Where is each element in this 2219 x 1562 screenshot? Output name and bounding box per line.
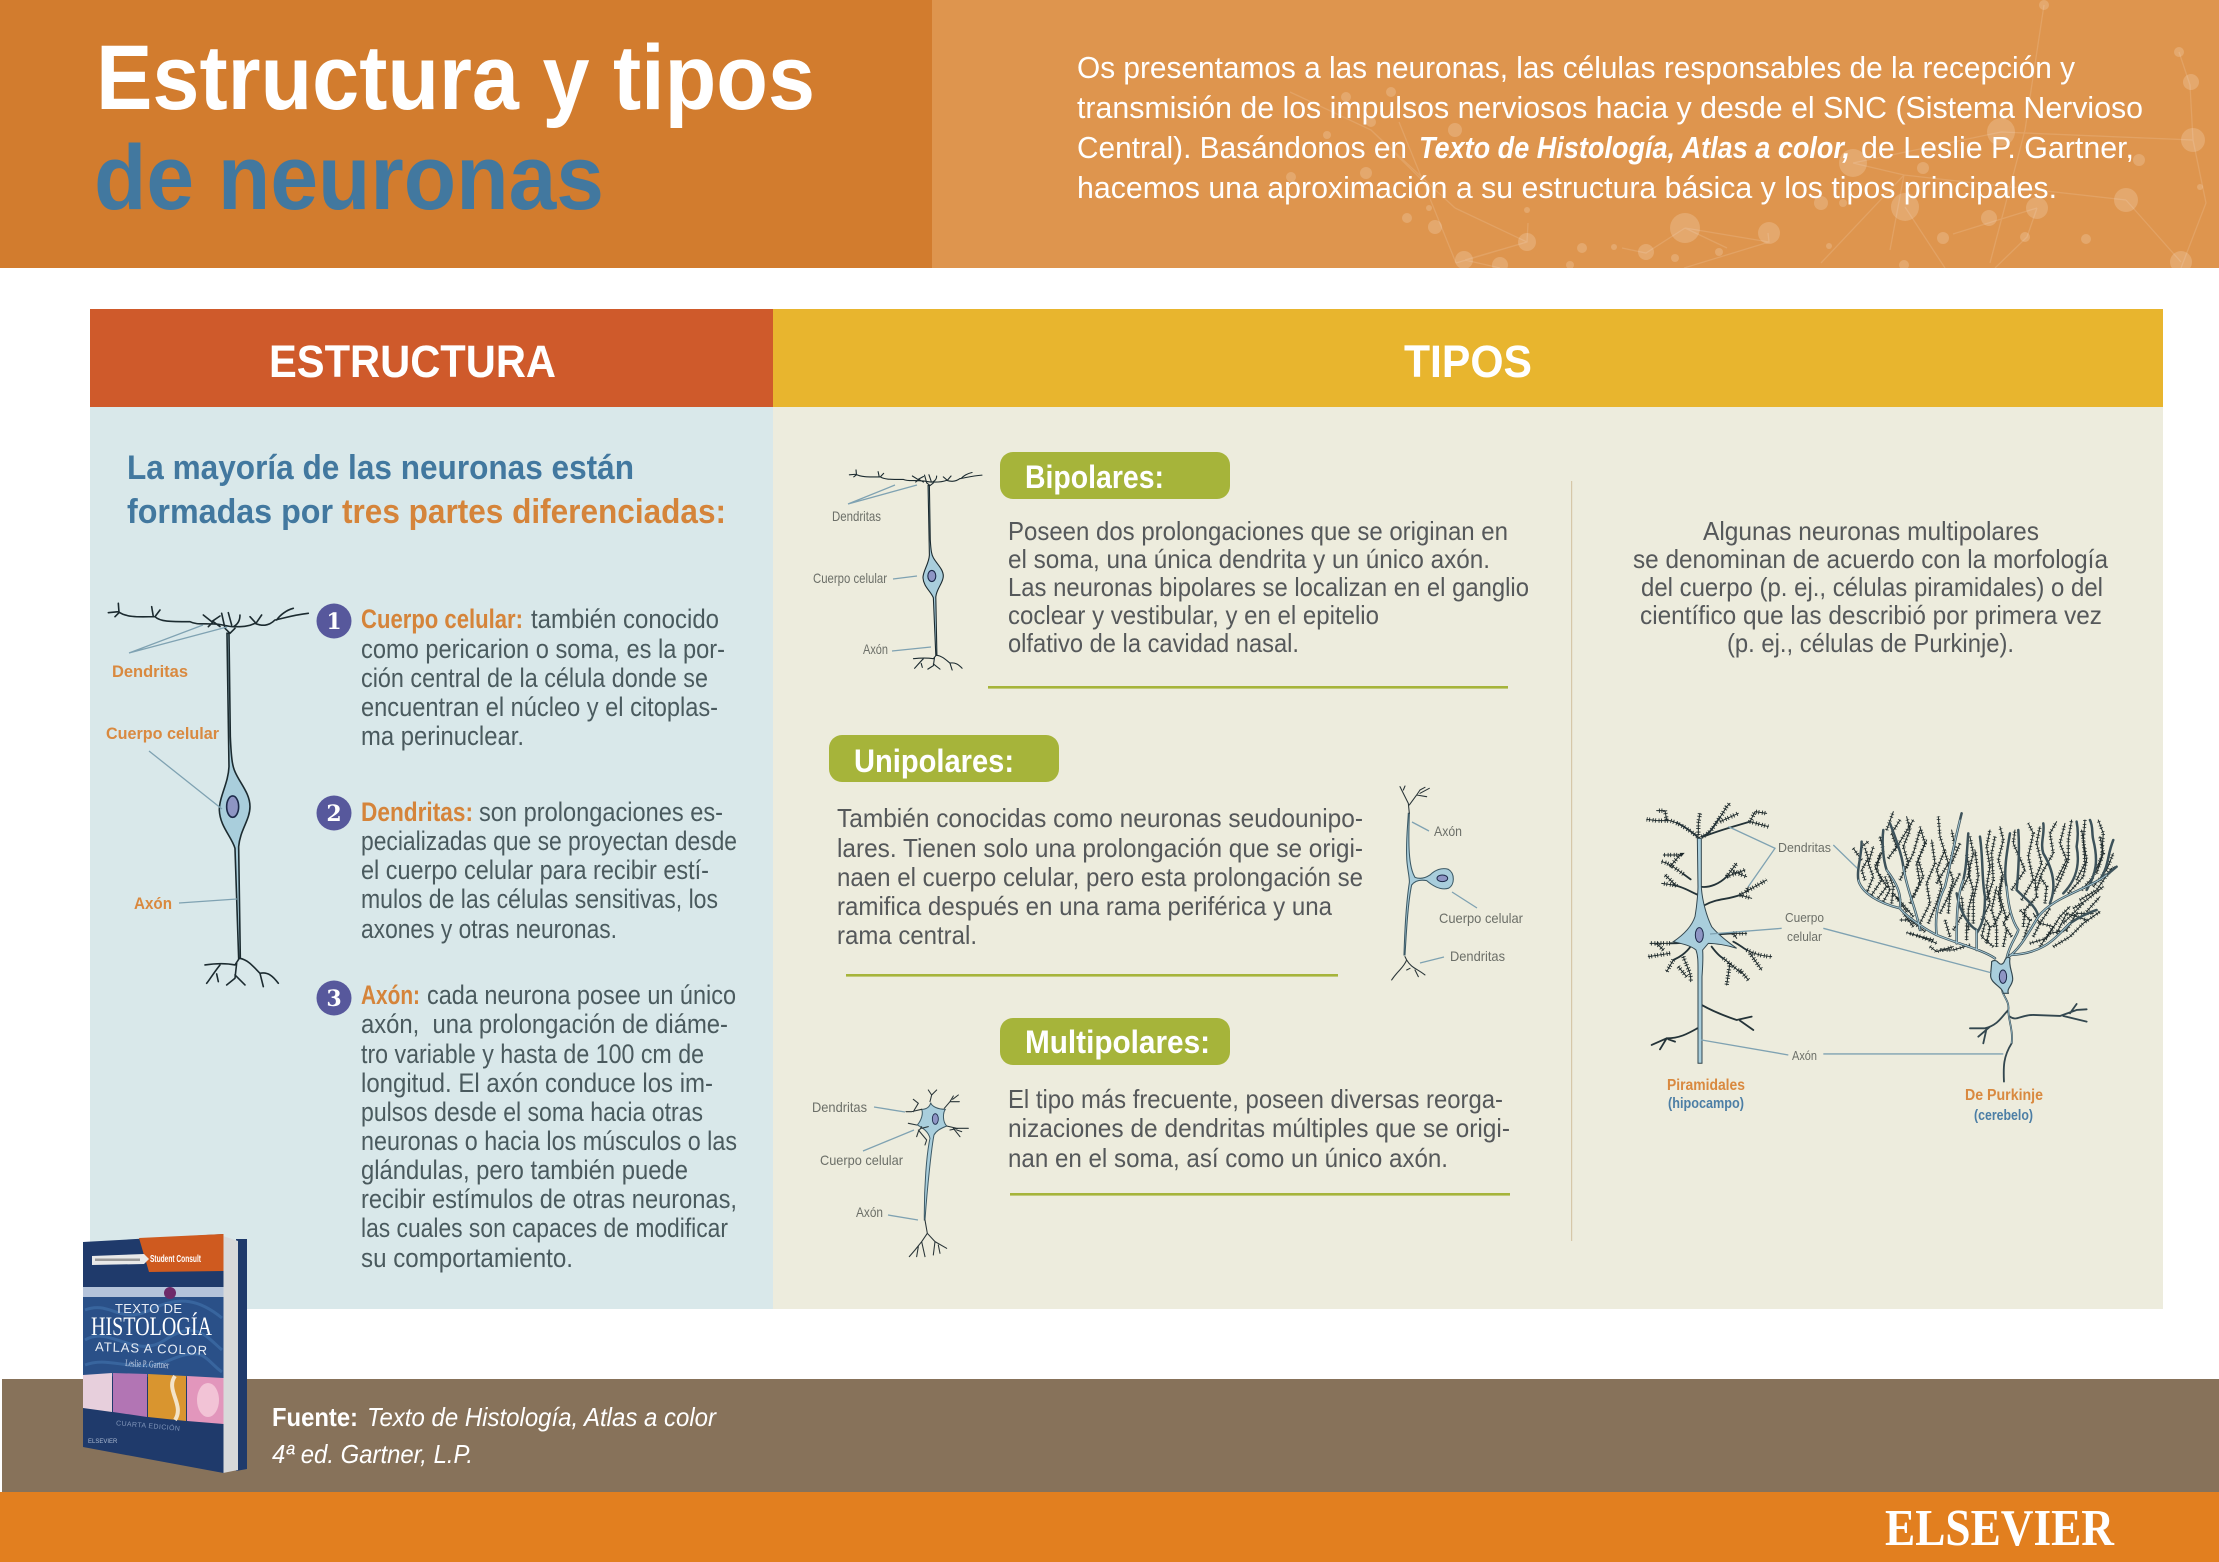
item 3: axón: pulsos desde el soma hacia otras	[361, 1097, 703, 1127]
label: dendritas: Dendritas	[1778, 840, 1831, 855]
item 2: dendritas: pecializadas que se proyectan desde	[361, 826, 737, 856]
diagram: multipolar neuron: Axón	[856, 1204, 883, 1220]
item 3: axón: Axón:	[361, 980, 420, 1010]
text: other multipolar neurons: Algunas neuronas multipolares	[1703, 516, 2039, 546]
diagram: unipolar neuron	[1392, 786, 1523, 980]
label: cuerpo celular: Cuerpo celular	[106, 724, 219, 743]
text: unipolares: También conocidas como neuronas seudounipo-	[837, 803, 1363, 833]
caption: piramidales: Piramidales	[1667, 1077, 1745, 1094]
diagram: bipolar neuron	[813, 470, 982, 670]
text: bipolares: Poseen dos prolongaciones que se originan en	[1008, 516, 1508, 546]
title: de neuronas	[94, 127, 604, 229]
caption: de Purkinje	[1965, 1087, 2043, 1124]
pill: unipolares: Unipolares:	[854, 743, 1014, 779]
source text: 4ª ed. Gartner, L.P.	[272, 1439, 473, 1469]
text: bipolares: coclear y vestibular, y en el epitelio	[1008, 600, 1379, 630]
item 1: cuerpo celular: también conocido	[531, 604, 719, 634]
diagram: unipolar neuron: Axón	[1434, 823, 1462, 839]
label: cuerpo celular	[1785, 910, 1824, 944]
text: other multipolar neurons: (p. ej., células de Purkinje).	[1727, 628, 2014, 658]
source band	[2, 1379, 2219, 1492]
caption: de Purkinje: De Purkinje	[1965, 1087, 2043, 1104]
item 3: axón: longitud. El axón conduce los im-	[361, 1068, 713, 1098]
source text	[272, 1402, 717, 1469]
item 3: axón: neuronas o hacia los músculos o las	[361, 1126, 737, 1156]
item 2: dendritas: Dendritas:	[361, 797, 473, 827]
neuron: pyramidal	[1647, 803, 1772, 1063]
subheading: La mayoría de las neuronas están	[127, 449, 634, 487]
panel: estructura	[90, 309, 773, 1309]
text: other multipolar neurons: se denominan de acuerdo con la morfología	[1633, 544, 2108, 574]
subheading	[127, 449, 726, 531]
diagram: multipolar neuron	[812, 1090, 968, 1257]
heading: estructura	[90, 309, 773, 407]
caption: piramidales	[1667, 1077, 1745, 1112]
section: unipolares	[829, 735, 1523, 980]
diagram: unipolar neuron: Dendritas	[1450, 948, 1505, 964]
item 1: cuerpo celular: como pericarion o soma, es la por-	[361, 634, 725, 664]
item 3: axón: axón, una prolongación de diáme-	[361, 1009, 728, 1039]
text: other multipolar neurons	[1633, 516, 2108, 658]
logo: elsevier: ELSEVIER	[1885, 1500, 2115, 1557]
heading: tipos: TIPOS	[1404, 336, 1532, 387]
book cover: TEXTO DE	[115, 1301, 182, 1316]
item 2: dendritas: axones y otras neuronas.	[361, 914, 617, 944]
label: dendritas: Dendritas	[112, 662, 188, 681]
title	[94, 27, 815, 229]
subheading: tres partes diferenciadas:	[342, 493, 726, 531]
pill: bipolares	[1000, 452, 1230, 499]
text: unipolares: rama central.	[837, 920, 977, 950]
number badge 3	[316, 980, 352, 1016]
pill: bipolares: Bipolares:	[1025, 459, 1164, 495]
book cover: CUARTA EDICIÓN	[116, 1418, 181, 1433]
book cover: Student Consult	[150, 1254, 201, 1265]
pill: multipolares: Multipolares:	[1025, 1024, 1210, 1060]
network background pattern	[1286, 0, 2206, 273]
source text: Texto de Histología, Atlas a color	[367, 1402, 717, 1432]
item 3: axón: su comportamiento.	[361, 1243, 573, 1273]
item 2: dendritas	[316, 796, 737, 944]
text: unipolares: naen el cuerpo celular, pero esta prolongación se	[837, 862, 1363, 892]
source text: Fuente:	[272, 1402, 358, 1432]
text: multipolares: nizaciones de dendritas múltiples que se origi-	[1008, 1113, 1510, 1143]
text: bipolares: el soma, una única dendrita y un único axón.	[1008, 544, 1490, 574]
diagram: bipolar neuron: Cuerpo celular	[813, 570, 887, 586]
intro paragraph: hacemos una aproximación a su estructura básica y los tipos principales.	[1077, 170, 2057, 205]
number badge 1: 1	[326, 609, 342, 635]
book cover: ELSEVIER	[88, 1439, 118, 1445]
item 3: axón: cada neurona posee un único	[427, 980, 736, 1010]
number badge 2	[316, 796, 352, 830]
section: bipolares	[813, 452, 1529, 689]
item 1: cuerpo celular: Cuerpo celular:	[361, 604, 523, 634]
diagram: multipolar neuron: Dendritas	[812, 1099, 867, 1115]
diagram: neuron	[106, 603, 308, 987]
text: bipolares: olfativo de la cavidad nasal.	[1008, 628, 1299, 658]
pill: multipolares	[1000, 1018, 1230, 1065]
text: bipolares	[1008, 516, 1529, 658]
text: other multipolar neurons: científico que las describió por primera vez	[1640, 600, 2102, 630]
intro paragraph: Texto de Histología, Atlas a color,	[1419, 130, 1850, 165]
caption: piramidales: (hipocampo)	[1668, 1095, 1744, 1112]
heading: estructura: ESTRUCTURA	[269, 336, 556, 387]
text: multipolares: nan en el soma, así como un único axón.	[1008, 1143, 1448, 1173]
label: cuerpo celular: celular	[1787, 929, 1823, 944]
footer band	[0, 1492, 2219, 1562]
diagram: pyramidal and Purkinje neurons	[1647, 803, 2117, 1124]
text: other multipolar neurons: del cuerpo (p. ej., células piramidales) o del	[1641, 572, 2103, 602]
item 3: axón: las cuales son capaces de modificar	[361, 1213, 728, 1243]
item 1: cuerpo celular: ción central de la célula donde se	[361, 663, 708, 693]
book cover	[83, 1234, 247, 1473]
text: unipolares: lares. Tienen solo una prolongación que se origi-	[837, 833, 1363, 863]
label: axón: Axón	[134, 894, 172, 913]
intro paragraph	[1077, 50, 2143, 205]
book cover: HISTOLOGÍA	[91, 1312, 212, 1341]
diagram: bipolar neuron: Dendritas	[832, 508, 881, 524]
item 2: dendritas: el cuerpo celular para recibir estí-	[361, 855, 709, 885]
item 3: axón	[316, 980, 737, 1273]
text: multipolares	[1008, 1084, 1510, 1173]
intro paragraph: de Leslie P. Gartner,	[1861, 130, 2134, 165]
diagram: multipolar neuron: Cuerpo celular	[820, 1152, 903, 1168]
item 3: axón: glándulas, pero también puede	[361, 1155, 688, 1185]
item 1: cuerpo celular	[316, 604, 725, 751]
text: bipolares: Las neuronas bipolares se localizan en el ganglio	[1008, 572, 1529, 602]
item 3: axón: recibir estímulos de otras neuronas,	[361, 1184, 737, 1214]
caption: de Purkinje: (cerebelo)	[1974, 1107, 2033, 1124]
text: multipolares: El tipo más frecuente, poseen diversas reorga-	[1008, 1084, 1503, 1114]
item 1: cuerpo celular: ma perinuclear.	[361, 721, 524, 751]
item 1: cuerpo celular: encuentran el núcleo y el citoplas-	[361, 692, 718, 722]
text: unipolares: ramifica después en una rama periférica y una	[837, 891, 1332, 921]
number badge 2: 2	[326, 801, 342, 827]
intro paragraph: transmisión de los impulsos nerviosos hacia y desde el SNC (Sistema Nervioso	[1077, 90, 2143, 125]
leader lines	[1702, 827, 2003, 1055]
diagram: bipolar neuron: Axón	[863, 641, 888, 657]
book cover: ATLAS A COLOR	[95, 1339, 207, 1358]
header band	[0, 0, 2219, 273]
text: unipolares	[837, 803, 1363, 950]
title: Estructura y tipos	[96, 27, 815, 129]
intro paragraph: Central). Basándonos en	[1077, 130, 1407, 165]
subheading: formadas por	[127, 493, 333, 531]
label: axón: Axón	[1792, 1048, 1817, 1063]
number badge 1	[316, 604, 352, 638]
pill: unipolares	[829, 735, 1059, 782]
number badge 3: 3	[326, 986, 342, 1012]
intro paragraph: Os presentamos a las neuronas, las células responsables de la recepción y	[1077, 50, 2075, 85]
item 2: dendritas: son prolongaciones es-	[479, 797, 723, 827]
item 2: dendritas: mulos de las células sensitivas, los	[361, 884, 718, 914]
panel: tipos	[773, 309, 2163, 1309]
neuron: Purkinje	[1853, 812, 2117, 1082]
section: multipolares	[812, 1018, 1510, 1257]
diagram: unipolar neuron: Cuerpo celular	[1439, 910, 1523, 926]
item 3: axón: tro variable y hasta de 100 cm de	[361, 1039, 704, 1069]
book cover: Leslie P. Gartner	[125, 1358, 170, 1371]
heading: tipos	[773, 309, 2163, 407]
label: cuerpo celular: Cuerpo	[1785, 910, 1824, 925]
